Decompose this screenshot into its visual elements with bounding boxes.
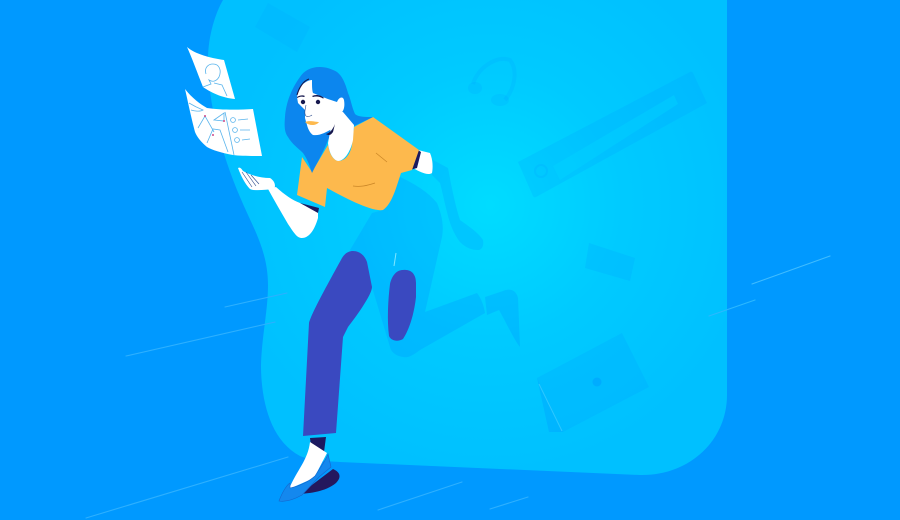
ghost icon: headphones [468,59,515,106]
shoe [279,454,331,501]
ghost icon: envelope middle [585,243,635,281]
forearm [268,187,318,238]
sleeve cuff back [410,150,421,170]
back leg, translucent [350,177,520,357]
back foot, translucent [485,290,520,347]
foot [289,442,327,489]
speed lines [86,256,830,518]
front leg [303,251,372,436]
hairline shadow [297,79,309,95]
nose [305,105,312,116]
jaw shadow [326,124,335,135]
hair [285,67,373,173]
knee patch [388,270,416,341]
back arm hand [413,150,433,174]
paper: chart and list [185,89,262,156]
pants highlight [394,253,396,266]
neck [328,110,354,161]
shirt [297,117,419,210]
lips [305,121,319,125]
ghost icon: search bar [518,72,707,197]
hand [238,168,275,190]
paper: portrait [187,47,235,99]
back arm, translucent [432,160,483,250]
sleeve cuff front [300,203,319,213]
eyes and brows [297,95,324,104]
portal shape [208,0,727,475]
sock [310,437,326,452]
ghost icon: laptop [537,333,649,432]
ghost icon: envelope top [255,3,310,52]
face [297,79,344,135]
shoe shadow [300,469,340,494]
